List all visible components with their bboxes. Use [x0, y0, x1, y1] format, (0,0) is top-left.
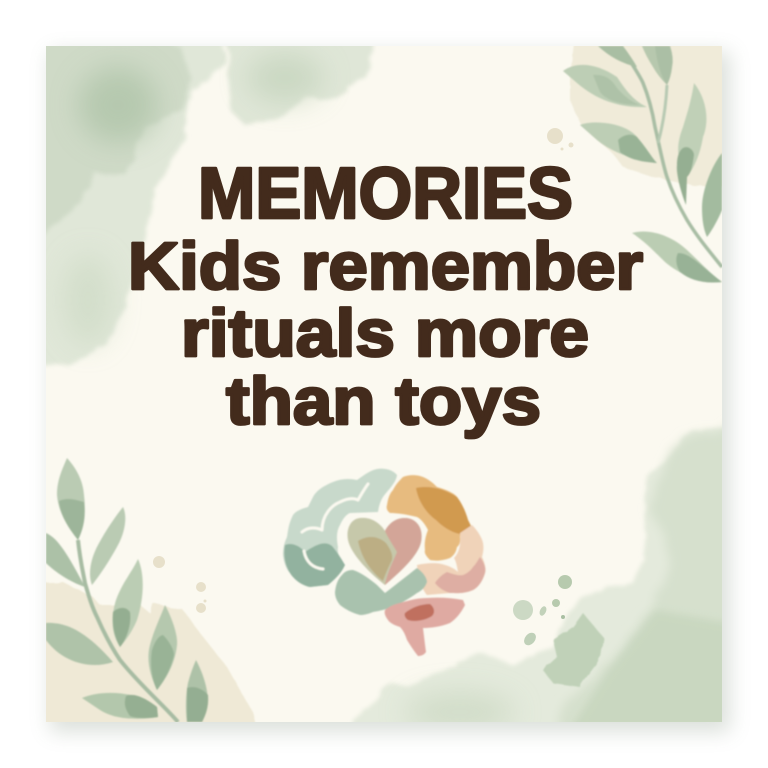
title line: MEMORIES: MEMORIES — [198, 154, 573, 234]
brain: frontal sage lobe — [283, 469, 397, 587]
brain: orange lobe — [387, 475, 472, 561]
title line: than toys: than toys — [226, 364, 541, 439]
brain: lower sage lobe — [335, 568, 427, 615]
title line: Kids remember: Kids remember — [128, 229, 643, 304]
watercolor wash: top left — [30, 30, 375, 365]
paint splatters: beige — [153, 128, 574, 613]
watercolor wash: bottom right — [352, 424, 722, 722]
title — [128, 154, 643, 439]
watercolor stain: bottom left — [40, 582, 257, 730]
brain: peach lobe — [417, 525, 485, 595]
botanical sprig: bottom left — [46, 458, 208, 722]
heart — [348, 518, 422, 585]
title line: rituals more: rituals more — [181, 296, 589, 371]
botanical sprig: top right — [563, 46, 722, 283]
watercolor stain: top right — [570, 40, 730, 187]
brain: orange lobe pigment — [416, 487, 472, 534]
brain: rosy lobe overlay — [435, 557, 485, 593]
brain: cerebellum and stem — [385, 598, 465, 656]
icon: watercolor brain with heart — [283, 469, 485, 656]
